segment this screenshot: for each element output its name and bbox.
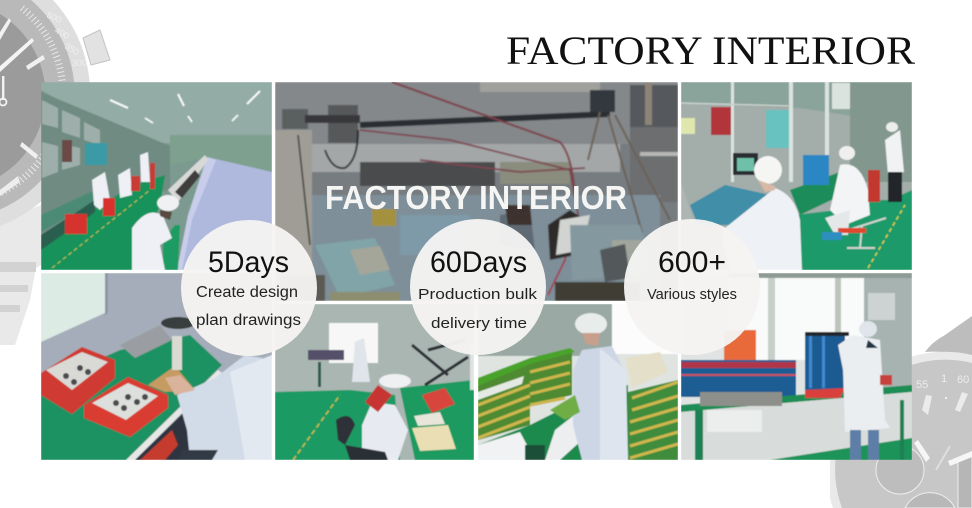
callout: 5 days [181, 220, 317, 356]
photo: workers with glasses trays [275, 304, 474, 460]
callout: 600+ styles: 600+ [658, 246, 726, 279]
watch decoration: top left [0, 0, 110, 345]
callout: 5 days: plan drawings [196, 312, 301, 329]
callout: 600+ styles: Various styles [647, 287, 737, 303]
photo: inspection bench with trays [41, 273, 272, 460]
title: FACTORY INTERIOR [506, 28, 915, 73]
photo: machines, darkened main panel [275, 82, 678, 301]
photo: worker at glue tubes [681, 273, 912, 460]
watch decoration: bottom right: 55 [916, 379, 928, 391]
callout: 5 days: Create design [196, 284, 298, 301]
photo: worker with stacked green trays [478, 304, 678, 460]
photo: workers at microscopes [681, 82, 912, 270]
watch decoration: top left: 300 [72, 58, 87, 68]
watch decoration: bottom right [827, 316, 972, 508]
callout: 600+ styles [624, 219, 760, 355]
callout: 60 days: Production bulk [418, 286, 538, 303]
callout: 60 days: 60Days [430, 246, 527, 279]
watch decoration: top left: 400 [53, 25, 71, 41]
watch decoration: bottom right: 1 [941, 373, 947, 385]
photo: assembly line hall [41, 82, 272, 270]
white overlay text on main photo: FACTORY INTERIOR [325, 179, 627, 216]
watch decoration: top left: 500 [45, 10, 63, 25]
callout: 60 days: delivery time [431, 315, 527, 332]
callout: 60 days [410, 219, 546, 355]
watch decoration: bottom right: 60 [957, 374, 969, 386]
callout: 5 days: 5Days [208, 246, 289, 279]
watch decoration: top left: 350 [63, 41, 81, 57]
